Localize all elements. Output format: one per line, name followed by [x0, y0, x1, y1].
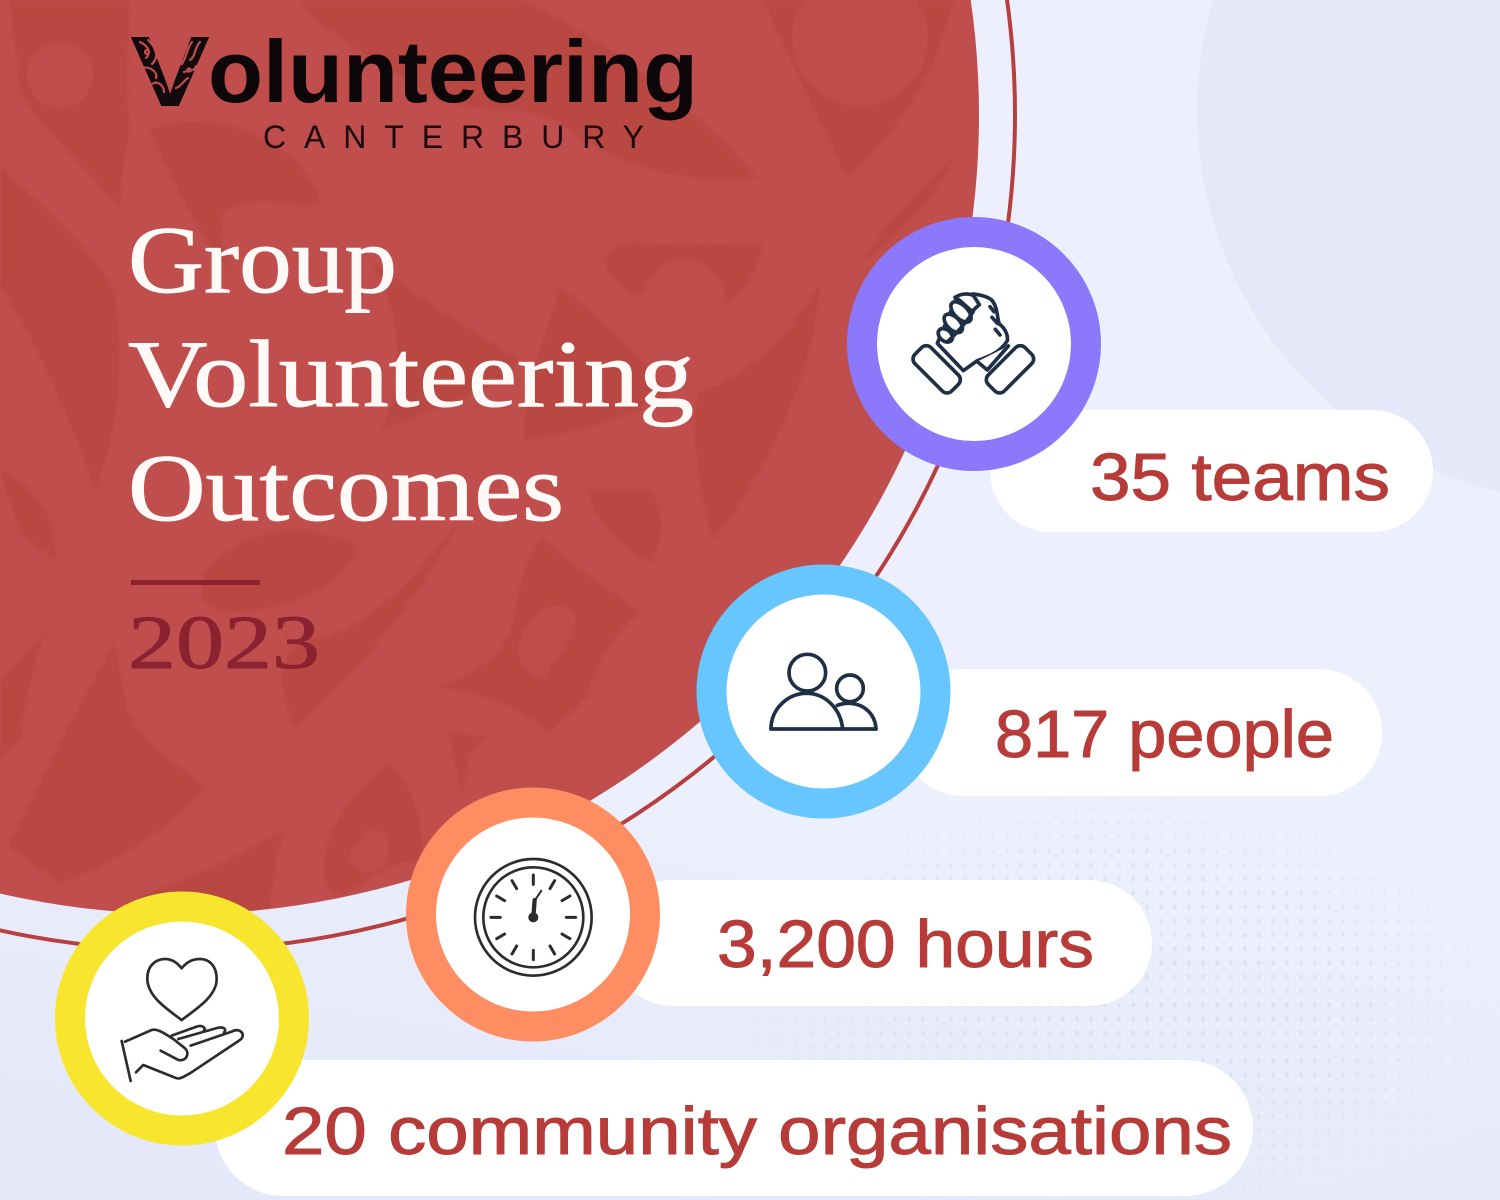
pill: hours — [610, 880, 1152, 1006]
icon: people in blue ring — [712, 580, 936, 804]
logo: Volunteering Canterbury — [130, 16, 698, 155]
icon: heart and hand in yellow ring — [70, 906, 294, 1130]
logo decorated V: V — [130, 16, 210, 128]
title — [128, 207, 694, 541]
pill: teams — [990, 410, 1433, 532]
stat: 35 teams — [990, 410, 1433, 532]
pill: people — [900, 669, 1382, 796]
stat: 817 people — [900, 669, 1382, 796]
icon: handshake in purple ring — [862, 232, 1086, 456]
year: 2023 — [128, 601, 320, 685]
logo subtitle: CANTERBURY — [263, 119, 644, 155]
logo wordmark: olunteering — [208, 22, 698, 121]
icon: clock in orange ring — [421, 802, 645, 1026]
red outline ring — [0, 0, 1015, 950]
pill: organisations — [215, 1060, 1253, 1196]
title: Group — [128, 207, 397, 313]
label: teams: 35 teams — [1090, 440, 1390, 515]
label: people: 817 people — [995, 697, 1334, 772]
label: hours: 3,200 hours — [717, 907, 1094, 982]
title: Outcomes — [128, 435, 564, 541]
page background — [0, 834, 1443, 1200]
stat: 20 community organisations — [215, 1060, 1253, 1196]
title divider — [131, 580, 260, 585]
label: organisations: 20 community organisations — [282, 1094, 1232, 1169]
panel: red disc with koru pattern — [0, 0, 979, 912]
title: Volunteering — [128, 321, 694, 427]
light koru swirls — [27, 0, 928, 872]
stat: 3,200 hours — [610, 880, 1152, 1006]
